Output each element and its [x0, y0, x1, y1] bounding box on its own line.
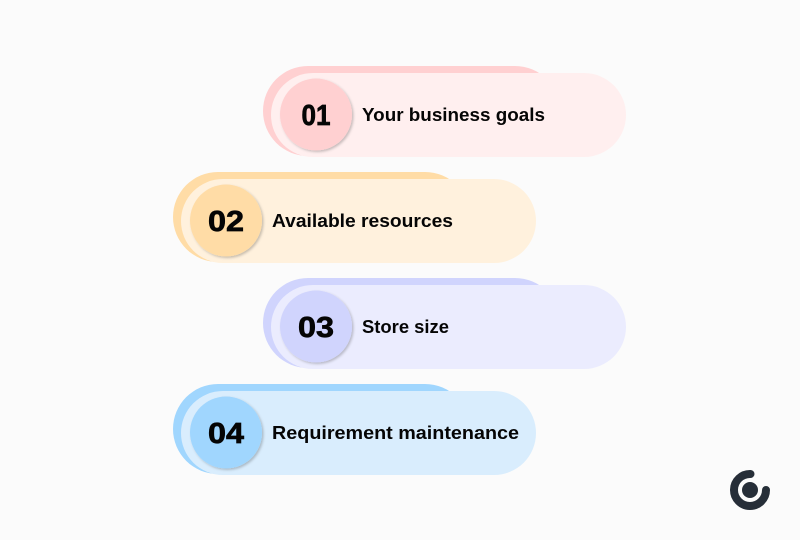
number circle 04 — [190, 396, 262, 468]
number 04: 04 — [208, 418, 244, 450]
number circle 03 — [280, 290, 352, 362]
back pill 02 — [173, 172, 470, 262]
number 03: 03 — [298, 312, 334, 344]
number circle 02 — [190, 184, 262, 256]
panel: step 01 — [263, 66, 626, 157]
front pill 03 — [271, 285, 626, 369]
front pill 04 — [181, 391, 536, 475]
back pill 03 — [263, 278, 560, 368]
label 04: Requirement maintenance — [272, 423, 519, 443]
number 01: 01 — [302, 100, 330, 132]
back pill 04 — [173, 384, 470, 474]
panel: step 03 — [263, 278, 626, 369]
icon: logo — [734, 474, 766, 506]
panel: step 04 — [173, 384, 536, 475]
label 01: Your business goals — [362, 105, 545, 125]
back pill 01 — [263, 66, 560, 156]
front pill 01 — [271, 73, 626, 157]
front pill 02 — [181, 179, 536, 263]
number 02: 02 — [208, 206, 244, 238]
label 03: Store size — [362, 317, 449, 337]
label 02: Available resources — [272, 211, 453, 231]
panel: step 02 — [173, 172, 536, 263]
number circle 01 — [280, 78, 352, 150]
